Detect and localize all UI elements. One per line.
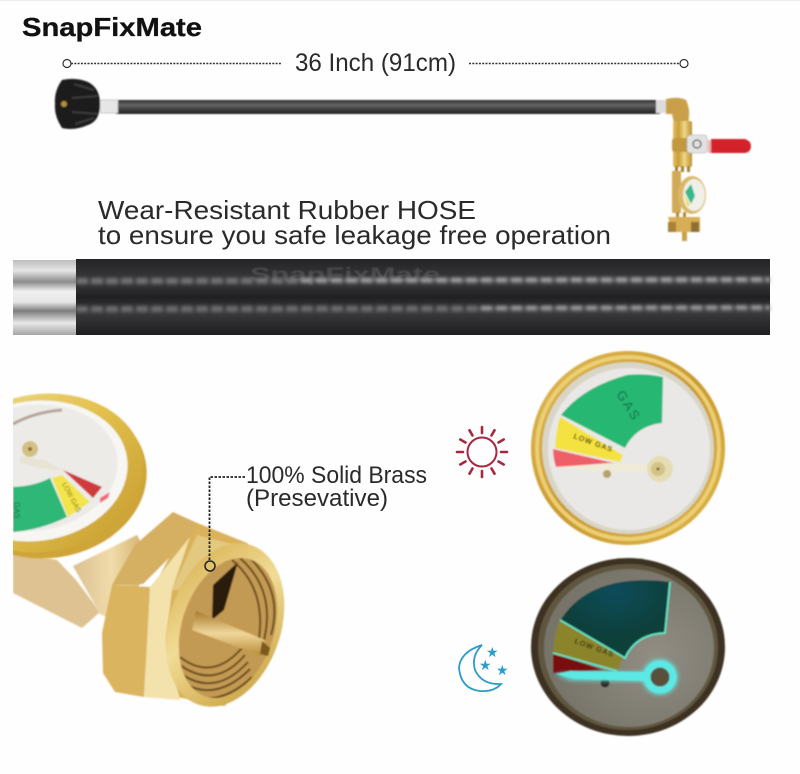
text: wear-resistant hose heading [98, 195, 611, 250]
large gauge [13, 392, 148, 560]
hub [647, 456, 673, 482]
product: full hose assembly [55, 79, 751, 241]
text: wear-resistant hose heading: to ensure you safe leakage free operation [98, 220, 611, 250]
glowing needle [555, 663, 674, 691]
gauge needle [20, 456, 64, 471]
olive low gas sector [553, 620, 623, 670]
faint watermark: SnapFixMate [250, 265, 440, 286]
green gas sector [561, 374, 663, 448]
small gauge [672, 171, 706, 214]
large gauge: GAS [12, 502, 21, 519]
gauge brass rim [531, 351, 725, 545]
valve body [672, 121, 693, 172]
center pin [192, 611, 270, 656]
thin hose [116, 100, 660, 114]
hose braid highlights [76, 279, 770, 309]
glow outlines [553, 582, 670, 671]
dark green sector [560, 580, 670, 658]
night glow gauge: LOW GAS [573, 636, 615, 659]
gauge green sector [13, 478, 67, 532]
needle [556, 463, 650, 472]
dark red sector [553, 653, 603, 673]
night glow gauge [531, 558, 725, 736]
text: wear-resistant hose heading: Wear-Resistant Rubber HOSE [98, 195, 476, 225]
dark face [544, 569, 714, 727]
hex nut and cylinder [101, 511, 249, 707]
hex center highlight [144, 537, 190, 700]
icon: moon and stars [459, 644, 509, 691]
dimension line: 36 inch: 36 Inch (91cm) [295, 49, 456, 77]
gauge yellow sector [52, 475, 90, 517]
icon: moon and stars: ★ [486, 644, 499, 660]
valve handle [687, 135, 751, 153]
callout: solid brass: (Presevative) [246, 485, 388, 512]
black connector nut [55, 79, 100, 129]
hose close-up band [13, 259, 770, 335]
icon: moon and stars: ★ [496, 662, 509, 678]
silver ferrule [13, 260, 76, 335]
threads [179, 558, 277, 698]
threaded ring [165, 543, 286, 708]
brand title: SnapFixMate [22, 12, 202, 42]
brass elbow [666, 98, 689, 123]
top edge line [0, 0, 800, 1]
large gauge: LOW GAS [60, 482, 82, 514]
gauge labels: GAS [613, 388, 644, 424]
red sector [553, 449, 618, 467]
right ferrule [656, 100, 668, 113]
icon: sun [457, 427, 507, 477]
cylinder [145, 522, 249, 707]
icon: moon and stars: ★ [479, 657, 492, 673]
gauge red sector [63, 470, 102, 498]
black rubber hose [76, 259, 770, 335]
elbow body [13, 552, 100, 628]
neck [72, 534, 140, 618]
callout: solid brass: 100% Solid Brass [246, 462, 427, 489]
callout: solid brass [205, 462, 427, 571]
brass bottom fitting [668, 212, 700, 241]
gauge hub [22, 441, 38, 457]
hex left facet [102, 585, 150, 697]
gauge face [548, 368, 710, 530]
brass fitting close-up [13, 392, 286, 708]
dark rim [531, 558, 725, 736]
daylight gauge [531, 351, 725, 545]
yellow low gas sector [555, 417, 623, 462]
dimension line: 36 inch [63, 49, 688, 77]
daylight gauge: LOW GAS [572, 431, 614, 454]
left ferrule [100, 100, 118, 113]
hex top facet [112, 512, 197, 585]
